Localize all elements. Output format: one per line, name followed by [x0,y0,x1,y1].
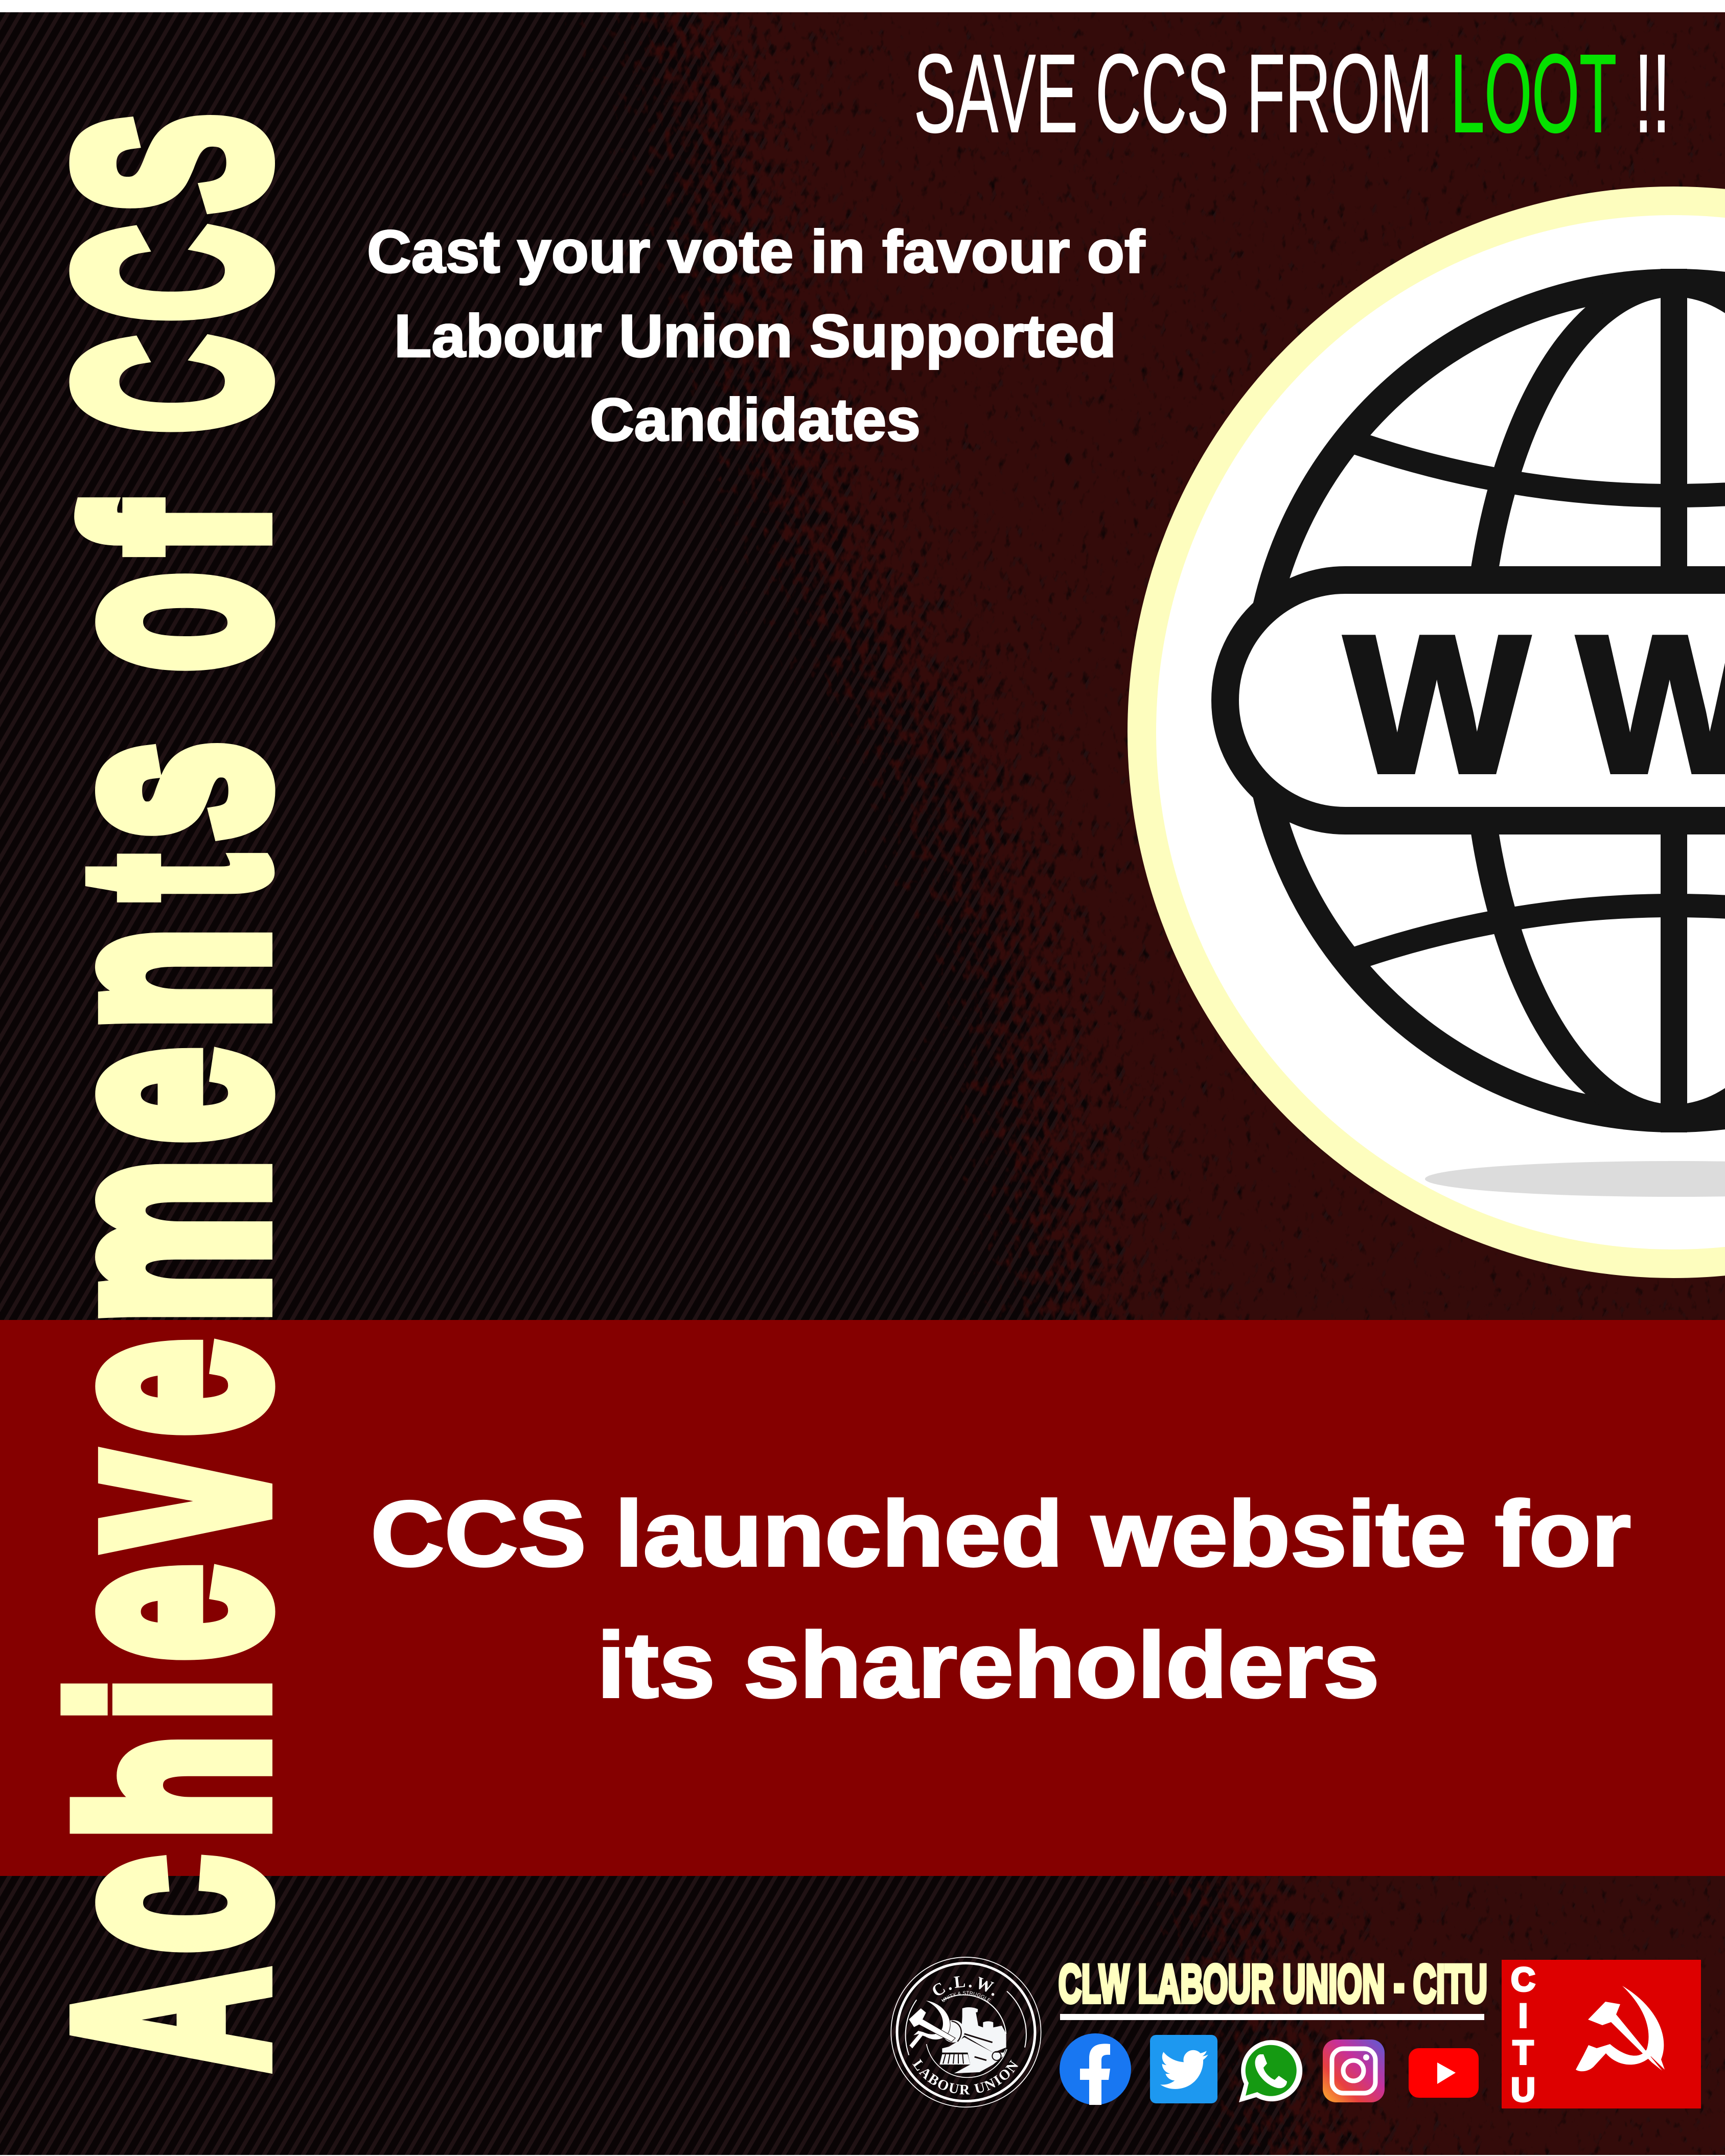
vertical title: achievements of CCS: f [40,502,314,553]
vertical title: achievements of CCS: o [0,573,324,671]
logo lettering: UNITY & STRUGGLE [941,1991,991,2002]
vertical title: achievements of CCS: i [23,1679,318,1720]
CITU vertical letters: T [1513,2033,1533,2071]
CITU vertical letters: U [1511,2071,1535,2108]
icon: youtube [1409,2048,1479,2098]
vertical title: achievements of CCS: C [25,337,318,432]
globe shadow [1425,1161,1725,1197]
vertical title: achievements of CCS: S [25,115,318,212]
vertical title: achievements of CCS: e [0,1340,324,1436]
icon: www globe [1142,201,1725,1264]
hammer and sickle [1576,1986,1665,2071]
logo lettering [909,1972,1023,2098]
logo lettering: C.L.W. [933,1976,995,1996]
main message: its shareholders [597,1613,1379,1717]
vertical title: achievements of CCS: e [0,1565,324,1661]
vertical title: achievements of CCS: c [0,1857,324,1953]
vertical title: achievements of CCS: h [35,1736,316,1839]
icon: instagram [1323,2039,1385,2102]
CITU vertical letters: I [1519,1997,1528,2034]
icon: whatsapp [1239,2040,1302,2102]
text block: vote appeal [367,218,1145,454]
www band [1225,580,1725,821]
text block: vote appeal: Candidates [590,386,921,454]
icon: twitter [1150,2035,1217,2103]
main message: CCS launched website for [371,1481,1631,1586]
logo rings [891,1957,1041,2107]
text block: vote appeal: Cast your vote in favour of [367,218,1145,286]
CITU vertical letters: C [1511,1960,1535,1998]
text block: vote appeal: Labour Union Supported [394,303,1116,370]
CITU badge [1502,1960,1701,2108]
globe disc [1142,201,1725,1264]
footer logo: CLW labour union [891,1957,1041,2107]
vertical title: achievements of CCS: t [31,856,316,899]
footer divider [1060,2014,1484,2020]
vertical title: achievements of CCS: e [0,1048,324,1143]
vertical title: achievements of CCS: n [0,928,324,1029]
vertical title: achievements of CCS [0,115,324,2070]
logo lettering: LABOUR UNION [909,2057,1023,2098]
icon: facebook [1060,2033,1131,2105]
vertical title: achievements of CCS: s [0,742,324,840]
heading: save CCS from loot: !! [1635,32,1670,156]
vertical title: achievements of CCS: m [0,1159,324,1324]
vertical title: achievements of CCS: A [22,1970,318,2070]
logo hammer and sickle [909,2001,955,2048]
red band [0,1320,1725,1876]
main message [371,1481,1631,1717]
CITU vertical letters [1511,1960,1535,2108]
vertical title: achievements of CCS: C [25,227,318,321]
logo locomotive [939,2007,1006,2073]
globe grid [1256,269,1725,1132]
vertical title: achievements of CCS: v [0,1453,324,1547]
